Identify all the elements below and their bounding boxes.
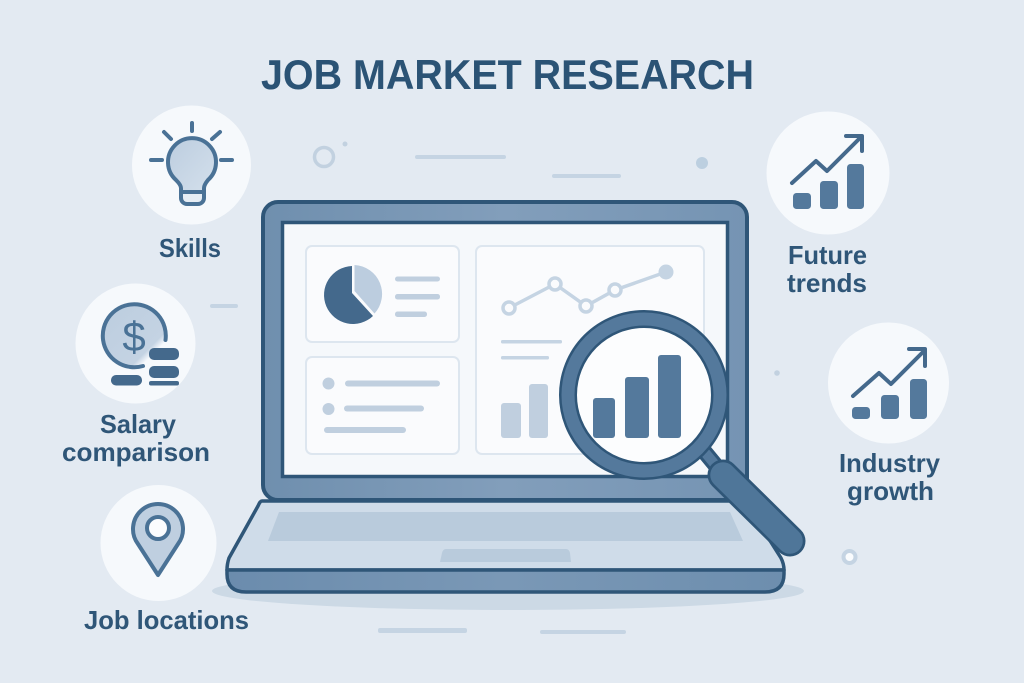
list card bbox=[306, 357, 459, 454]
magnifier handle bbox=[723, 475, 790, 541]
base front band bbox=[227, 570, 784, 592]
panel: job locations bbox=[84, 485, 249, 635]
pie chart bbox=[324, 265, 382, 324]
label: salary comparison: Salary bbox=[100, 409, 177, 439]
laptop bbox=[212, 202, 804, 610]
panel: salary comparison bbox=[62, 284, 210, 467]
label: job locations: Job locations bbox=[84, 605, 249, 635]
icon: coin and stacks: $ bbox=[122, 313, 146, 360]
magnifying glass bbox=[568, 319, 790, 541]
icon: light bulb bbox=[132, 106, 251, 224]
line chart bbox=[503, 264, 674, 314]
icon: coin and stacks bbox=[76, 284, 196, 404]
label: future trends: Future bbox=[788, 240, 867, 270]
label: industry growth: growth bbox=[847, 476, 934, 506]
pie chart card bbox=[306, 246, 459, 342]
panel: skills bbox=[132, 106, 251, 263]
laptop screen bbox=[282, 222, 728, 476]
icon: rising chart bbox=[766, 112, 890, 234]
faded bars bbox=[501, 384, 548, 438]
keyboard bbox=[268, 512, 743, 541]
trackpad bbox=[440, 549, 571, 562]
magnifier neck bbox=[703, 450, 722, 473]
laptop screen frame bbox=[263, 202, 747, 500]
title: JOB MARKET RESEARCH bbox=[261, 51, 754, 98]
icon: rising chart bbox=[828, 322, 949, 444]
chart card bbox=[476, 246, 704, 454]
laptop base bbox=[227, 501, 784, 592]
label: industry growth: Industry bbox=[839, 448, 941, 478]
icon: map pin bbox=[100, 485, 216, 601]
label: industry growth bbox=[839, 448, 941, 506]
label: salary comparison bbox=[62, 409, 210, 467]
panel: industry growth bbox=[828, 322, 949, 506]
panel: future trends bbox=[766, 112, 890, 298]
label: skills: Skills bbox=[159, 233, 221, 263]
label: salary comparison: comparison bbox=[62, 437, 210, 467]
magnified bars bbox=[593, 355, 681, 438]
laptop shadow bbox=[212, 572, 804, 610]
decorative ring and dots bbox=[210, 142, 856, 634]
magnifier lens bbox=[568, 319, 720, 471]
label: future trends: trends bbox=[787, 268, 867, 298]
label: future trends bbox=[787, 240, 867, 298]
